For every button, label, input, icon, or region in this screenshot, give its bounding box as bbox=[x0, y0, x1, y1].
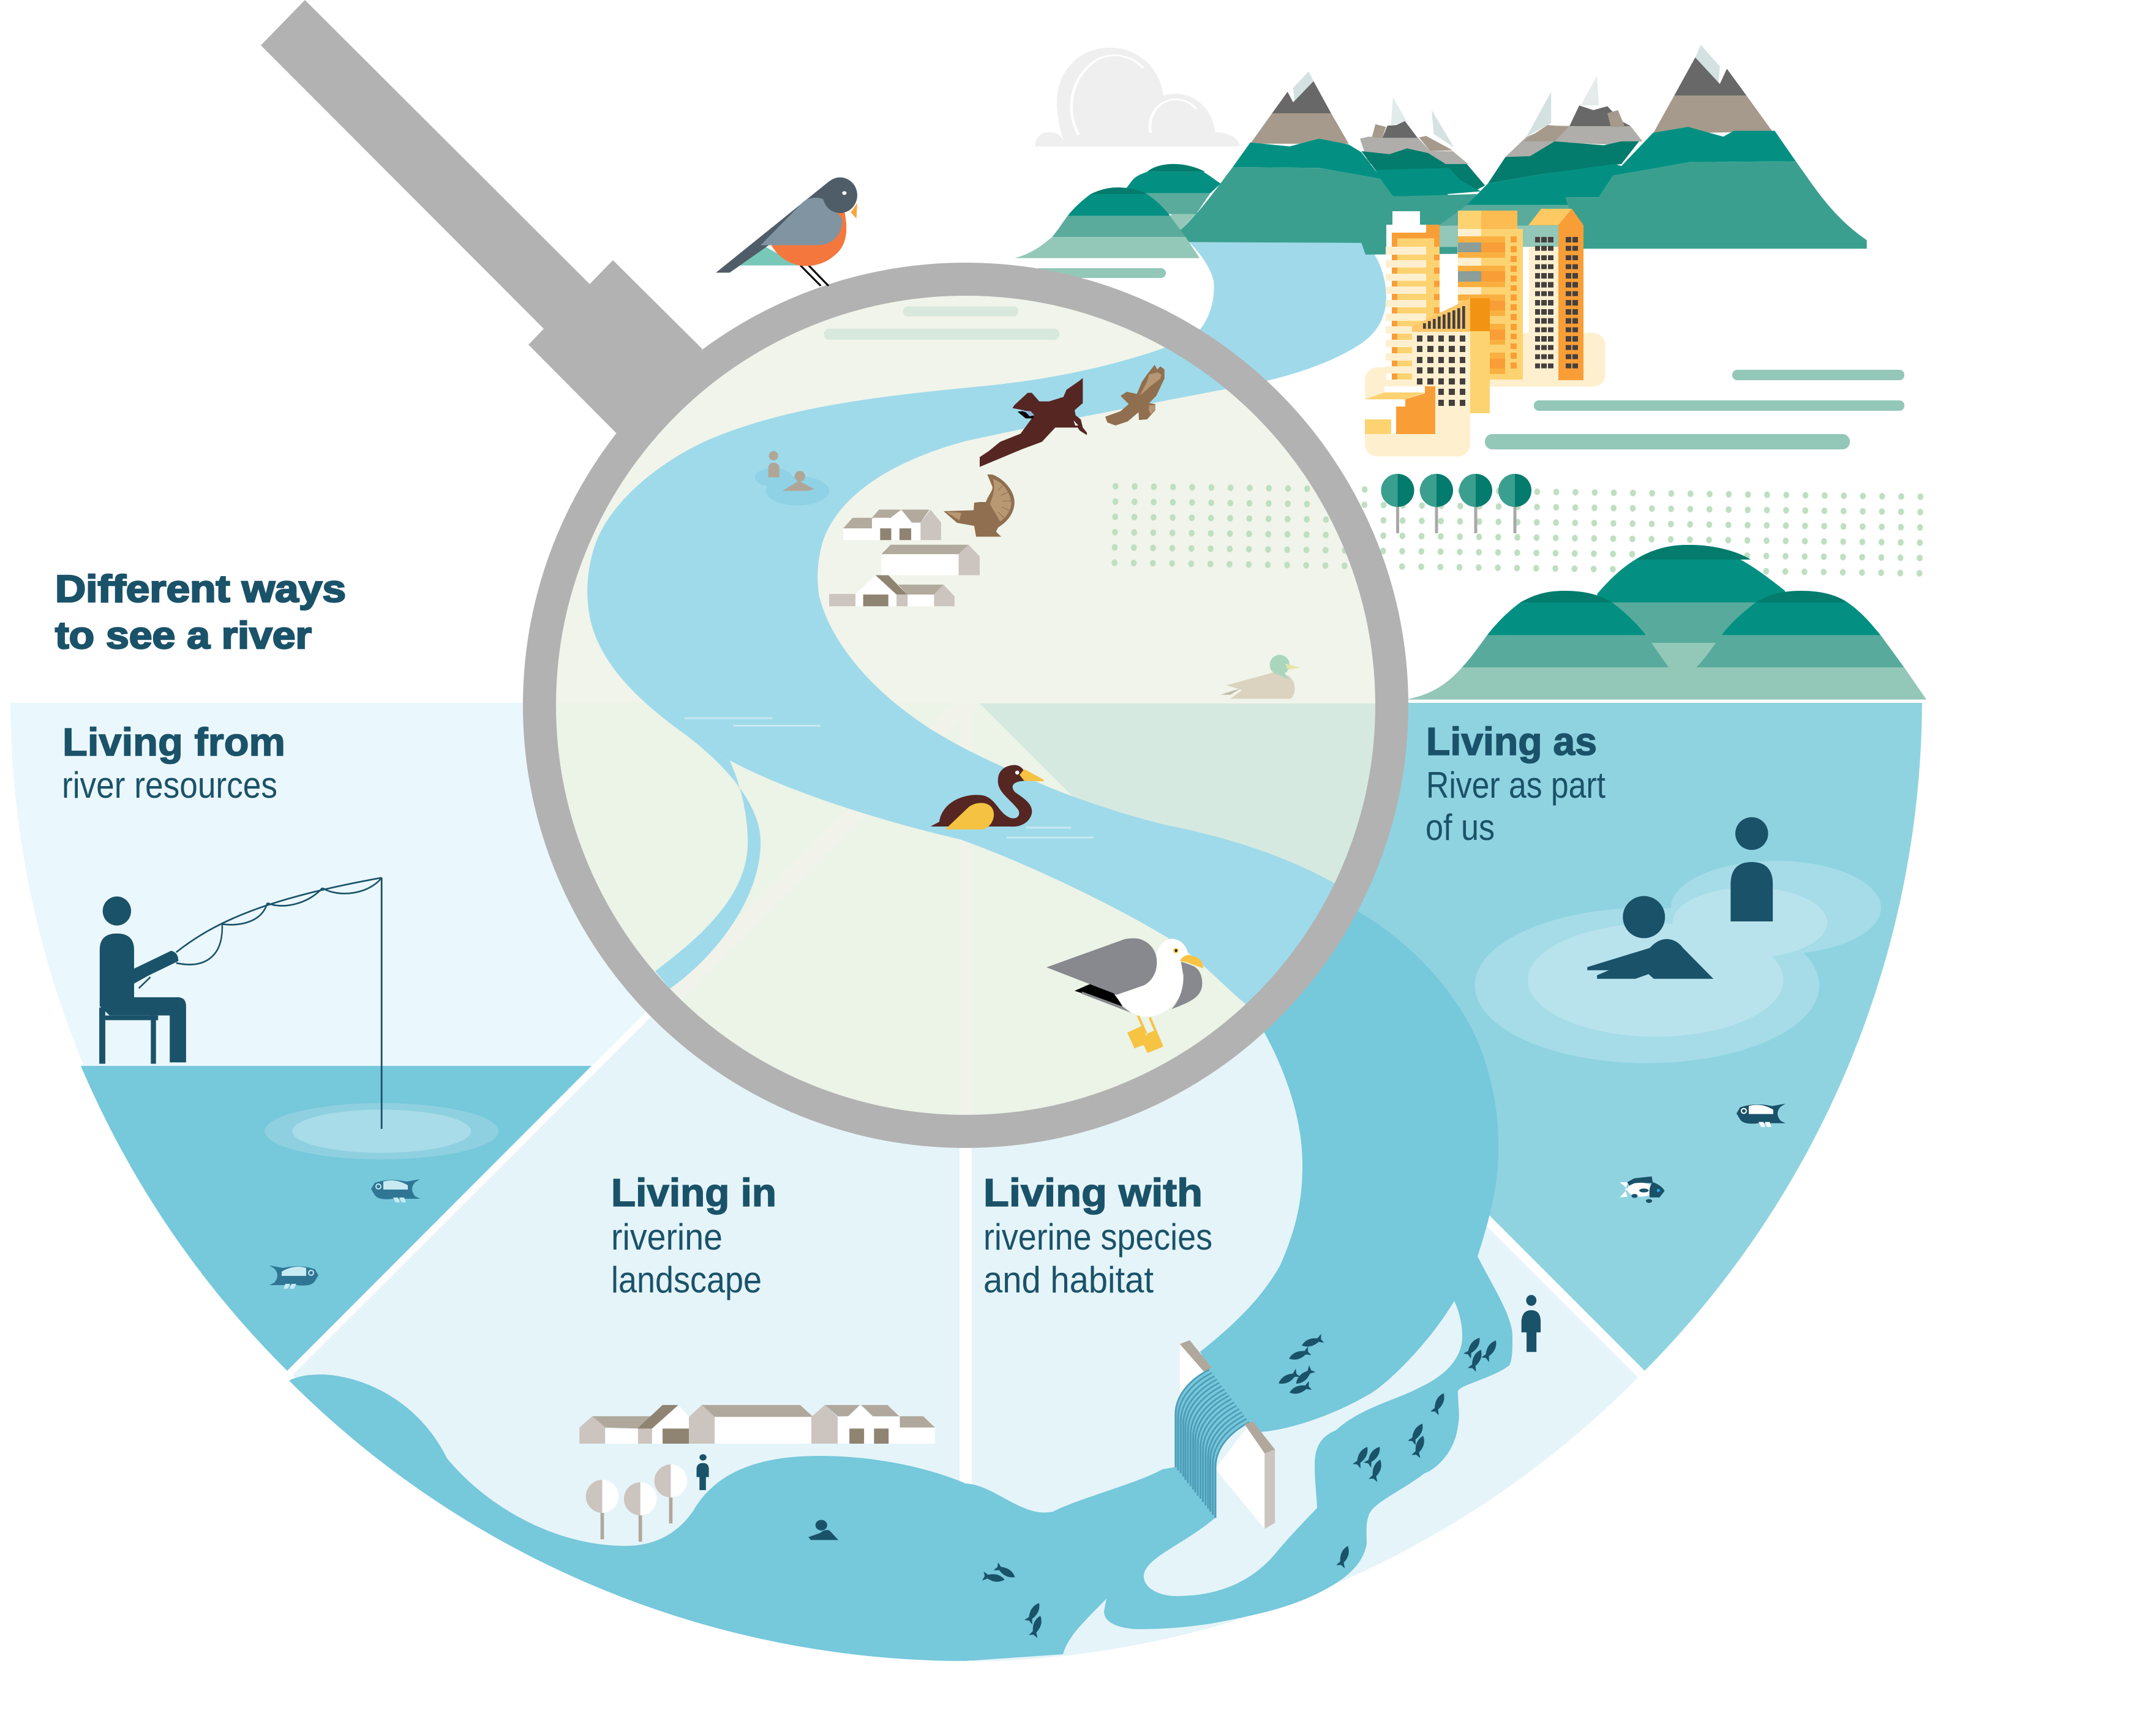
icon: robin on magnifier bbox=[716, 178, 857, 286]
text: living with bbox=[983, 1171, 1212, 1300]
panel: living as sector bbox=[977, 703, 1922, 1371]
text: living with: riverine species bbox=[983, 1217, 1212, 1258]
text: living in: landscape bbox=[611, 1259, 762, 1300]
trees bbox=[1381, 474, 1531, 533]
icon: duck bbox=[1220, 655, 1301, 699]
fish in living from water bbox=[269, 1179, 420, 1289]
river: lower wide channel bbox=[289, 857, 1512, 1661]
text: living with: Living with bbox=[983, 1171, 1203, 1215]
building: front tower bbox=[1412, 298, 1490, 413]
title bbox=[55, 568, 346, 657]
text: living in bbox=[611, 1171, 776, 1300]
houses in lens bbox=[829, 509, 980, 606]
dotted field bbox=[1108, 479, 1926, 582]
bars near hills and buildings bbox=[1035, 268, 1904, 449]
text: living from: Living from bbox=[62, 720, 285, 764]
icon: flying eagle bbox=[1105, 365, 1165, 426]
river: upper pale channel bbox=[1163, 242, 1386, 404]
ripples bbox=[685, 718, 1094, 838]
magnifier handle bbox=[261, 0, 702, 433]
small swimmers in lens bbox=[755, 451, 829, 506]
text: living from: river resources bbox=[62, 765, 277, 806]
title: Different ways bbox=[55, 568, 346, 610]
top bars bbox=[824, 306, 1059, 340]
panel: living from sector bbox=[10, 703, 955, 1371]
small fish in lower river bbox=[982, 1334, 1500, 1638]
swimmers and fish in living as bbox=[1475, 817, 1881, 1203]
magnifier lens content bbox=[556, 296, 1375, 1115]
icon: seagull bbox=[1046, 939, 1203, 1053]
text: living with: and habitat bbox=[983, 1259, 1154, 1300]
side channel in lens bbox=[655, 734, 761, 989]
title: to see a river bbox=[55, 615, 312, 657]
building: right tower bbox=[1528, 209, 1583, 380]
lower right green hills bbox=[1408, 545, 1926, 700]
panel: living with sector bbox=[972, 711, 1638, 1662]
text: living from bbox=[62, 720, 285, 806]
river in lens bbox=[587, 348, 1335, 1004]
text: living as bbox=[1425, 719, 1606, 848]
magnifier ring bbox=[539, 279, 1392, 1131]
panel: living in sector bbox=[293, 708, 960, 1662]
mountains, hills and cloud bbox=[1015, 45, 1867, 258]
text: living in: riverine bbox=[611, 1217, 723, 1258]
city buildings bbox=[1365, 209, 1606, 457]
building: left tower bbox=[1386, 211, 1440, 380]
villages, trees and people in living in bbox=[579, 1405, 935, 1542]
back green hill bbox=[1122, 164, 1221, 230]
icon: swan bbox=[931, 765, 1043, 830]
building: low block bbox=[1365, 386, 1435, 434]
icon: grouse bbox=[944, 474, 1015, 537]
mountain range bbox=[1180, 45, 1867, 255]
text: living as: Living as bbox=[1426, 719, 1597, 763]
text: living in: Living in bbox=[611, 1171, 776, 1215]
water: living from bbox=[81, 1066, 592, 1371]
building: middle tower bbox=[1458, 211, 1523, 380]
text: living as: River as part bbox=[1426, 765, 1606, 806]
front green hill bbox=[1015, 187, 1200, 258]
icon: flying dark bird bbox=[980, 378, 1087, 467]
icon: cloud bbox=[1035, 48, 1241, 146]
text: living as: of us bbox=[1425, 807, 1495, 848]
weir bbox=[1176, 1295, 1541, 1529]
fisherman scene bbox=[99, 878, 498, 1160]
